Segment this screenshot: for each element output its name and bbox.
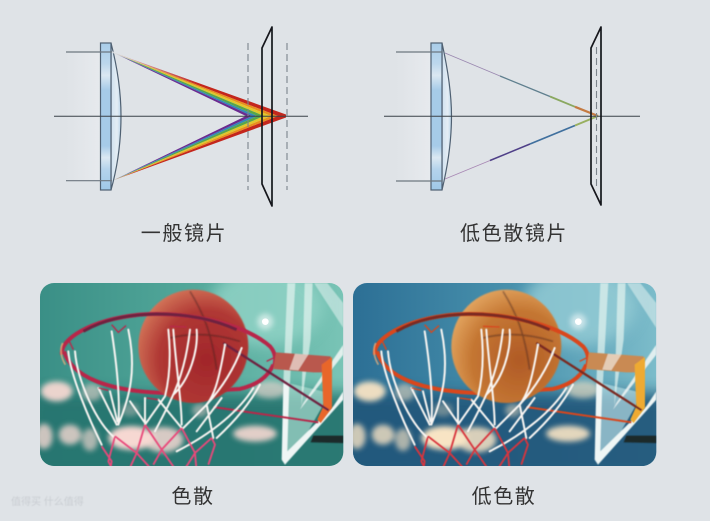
diagram: low dispersion lens [384,27,640,205]
focus dashed lines [248,43,287,190]
label: low dispersion lens: 低色散镜片 [460,223,568,245]
lens [431,43,452,190]
image plane [262,27,272,206]
photo: low dispersion example [340,266,670,480]
light beam [66,52,102,181]
light beam [396,52,432,181]
rainbow rays top [112,52,286,116]
label: dispersion: 色散 [171,486,215,508]
incoming rays [396,52,442,181]
optical axis [384,115,640,117]
label: standard lens: 一般镜片 [141,223,227,245]
lens [100,43,121,190]
rainbow rays bottom [114,116,286,180]
image plane [591,27,601,205]
thin rays bottom [445,116,598,179]
label: low dispersion: 低色散 [472,486,536,508]
watermark: 值得买 什么值得 [11,497,84,508]
incoming rays [66,52,112,181]
optical axis [54,115,308,117]
photo: dispersion example [27,266,357,480]
focus dashed line [596,47,598,186]
diagram: standard lens [54,27,308,206]
thin rays top [445,53,598,116]
